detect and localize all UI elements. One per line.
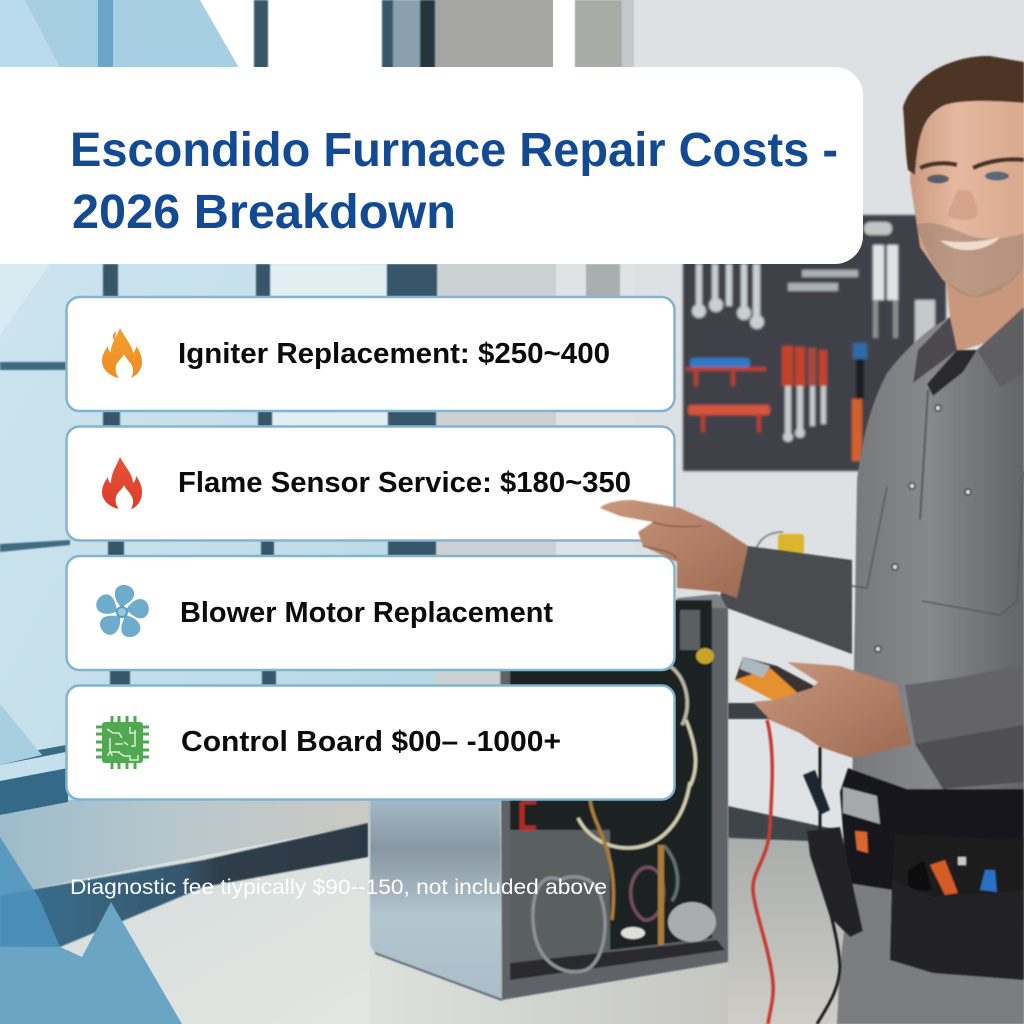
floor below furnace bbox=[370, 940, 728, 1024]
inner partition bbox=[436, 0, 556, 800]
pouch lip bbox=[890, 880, 1024, 980]
right tool pouch bbox=[890, 834, 1024, 980]
icon: circuit chip bbox=[96, 716, 149, 769]
furnace top frame bbox=[677, 594, 728, 608]
orange tag bbox=[855, 831, 868, 853]
lower hand bbox=[753, 662, 912, 758]
wrenches bbox=[692, 264, 764, 329]
screwdriver in pouch bbox=[803, 770, 830, 815]
label: Flame Sensor Service: $180~350 bbox=[178, 467, 631, 499]
icon: orange flame bbox=[102, 328, 142, 378]
title text: Escondido Furnace Repair Costs - bbox=[70, 124, 838, 177]
furnace side bottom edge bbox=[375, 953, 502, 1000]
label: Control Board $00– -1000+ bbox=[181, 726, 561, 758]
upper bright window panes bbox=[200, 0, 575, 70]
neck bbox=[945, 250, 1024, 352]
top triangle lighter facet bbox=[0, 0, 70, 87]
duct column bbox=[622, 0, 634, 70]
card background bbox=[66, 426, 674, 540]
icon: fan bbox=[94, 585, 152, 641]
finger fold bbox=[643, 522, 701, 558]
trousers bbox=[837, 880, 1024, 1024]
floor bbox=[0, 823, 370, 1024]
furnace lower panel bbox=[510, 830, 610, 962]
beard shadow bbox=[916, 223, 1024, 297]
left blue facet bbox=[0, 837, 60, 947]
silver duct lower bbox=[586, 264, 620, 298]
second dark band bbox=[0, 768, 68, 815]
right collar bbox=[977, 307, 1024, 387]
silver duct bbox=[575, 0, 622, 70]
multimeter bbox=[735, 657, 818, 700]
short spanners bbox=[788, 270, 858, 291]
blue tool on red rack bbox=[686, 358, 766, 386]
sleeve shadow bbox=[915, 725, 1024, 789]
red part bbox=[522, 802, 536, 828]
pouch tools bbox=[908, 857, 997, 895]
furnace side panel bbox=[370, 790, 502, 1000]
side strip gray bbox=[680, 610, 700, 650]
left collar bbox=[913, 317, 957, 383]
window mullions bbox=[0, 0, 437, 686]
placket bbox=[920, 390, 928, 520]
nose shadow bbox=[948, 190, 978, 220]
furnace unit bbox=[370, 594, 728, 1000]
brass pipe bbox=[658, 845, 664, 945]
furnace dark interior bbox=[510, 600, 712, 962]
shirt torso bbox=[852, 307, 1024, 800]
hair bbox=[903, 56, 1024, 175]
footnote: Diagnostic fee tiypically $90--150, not included above bbox=[70, 876, 607, 899]
skirting bbox=[0, 823, 368, 947]
left lighter facet bbox=[0, 264, 50, 335]
eyebrows bbox=[920, 159, 1024, 168]
red tool on rack bbox=[688, 405, 770, 432]
bottom blue triangle bbox=[0, 902, 182, 1024]
label: Blower Motor Replacement bbox=[180, 597, 553, 629]
pointing hand bbox=[600, 500, 748, 598]
internal capacitor bbox=[668, 902, 716, 942]
label: Igniter Replacement: $250~400 bbox=[178, 338, 610, 370]
pliers bbox=[864, 222, 898, 338]
right floor bbox=[728, 838, 1024, 1024]
silver gauge in belt bbox=[843, 787, 880, 824]
title panel bbox=[0, 67, 863, 264]
title background bbox=[0, 67, 863, 264]
card background bbox=[66, 686, 674, 800]
tool belt bbox=[840, 768, 1024, 890]
card background bbox=[66, 556, 674, 670]
card background bbox=[66, 297, 674, 411]
forearm sleeve holding meter bbox=[905, 664, 1024, 789]
upper gray partition bbox=[435, 0, 553, 70]
left tool pouch bbox=[807, 827, 863, 937]
card: flame sensor service bbox=[66, 426, 674, 540]
blue handle driver bbox=[852, 343, 867, 461]
shirt buttons bbox=[875, 405, 971, 652]
card: blower motor bbox=[66, 556, 674, 670]
screwdrivers bbox=[782, 346, 827, 442]
smile bbox=[940, 237, 1000, 250]
lower left wall bbox=[0, 800, 370, 895]
lower left dark band bbox=[0, 745, 66, 765]
left wall tint bbox=[0, 704, 42, 765]
pegboard with tools bbox=[683, 215, 946, 471]
left eye bbox=[927, 174, 949, 184]
right upper wall bbox=[634, 0, 1024, 600]
card: igniter replacement bbox=[66, 297, 674, 411]
left pocket bbox=[852, 487, 887, 588]
inner collar shade bbox=[927, 350, 977, 396]
decorative blue triangle top left bbox=[0, 0, 250, 87]
yellow component bbox=[696, 648, 714, 664]
cables bbox=[753, 720, 840, 1024]
chest pocket bbox=[922, 471, 1024, 615]
pegboard panel bbox=[683, 215, 946, 471]
bright panes below title bbox=[270, 264, 388, 427]
icon: red flame bbox=[102, 457, 142, 509]
right eye bbox=[985, 172, 1009, 180]
white fitting bbox=[621, 927, 645, 939]
card: control board bbox=[66, 686, 674, 800]
tools right bbox=[915, 300, 935, 350]
wall rail bbox=[728, 703, 778, 719]
technician bbox=[600, 56, 1024, 1024]
right wall skirting bbox=[728, 806, 838, 842]
furnace shelf bbox=[510, 940, 725, 980]
pointing arm sleeve bbox=[720, 546, 852, 654]
top triangle mullion bbox=[98, 0, 113, 70]
glass window wall bbox=[0, 0, 436, 800]
small yellow device on shelf bbox=[755, 532, 804, 554]
title text: 2026 Breakdown bbox=[72, 186, 456, 239]
internal wires bbox=[533, 665, 696, 972]
furnace front frame bbox=[500, 600, 728, 1000]
face bbox=[910, 99, 1024, 297]
